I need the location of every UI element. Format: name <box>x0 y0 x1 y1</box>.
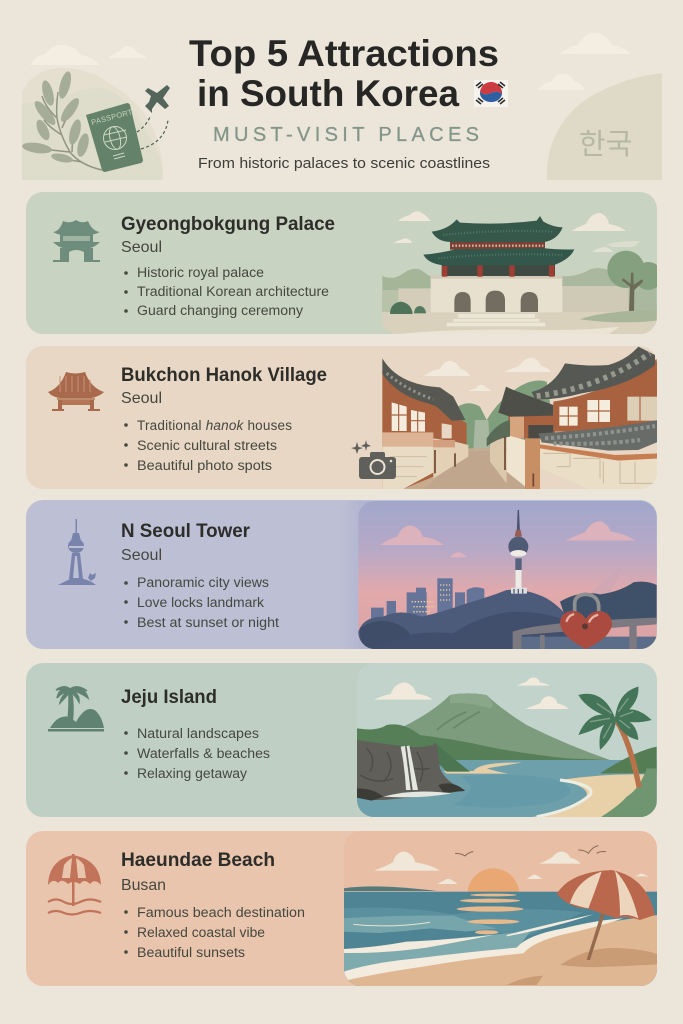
panel: Haeundae Beach <box>26 831 658 988</box>
text: Bukchon details: Seoul <box>121 390 162 407</box>
illustration: beach at sunset <box>343 831 658 988</box>
text: Haeundae details <box>121 850 305 960</box>
header decoration: right panel with Korean text: 한국 <box>579 129 632 161</box>
icon: South Korean flag <box>474 80 508 107</box>
text: palace details: Gyeongbokgung Palace <box>121 214 335 235</box>
text: palace details: Historic royal palace <box>137 265 264 280</box>
panel: Gyeongbokgung Palace <box>26 192 662 335</box>
header decoration: right panel with Korean text <box>547 73 662 180</box>
icon: plane with dashed route <box>137 85 170 149</box>
panel: Bukchon Hanok Village <box>26 346 660 489</box>
text: Bukchon details: Beautiful photo spots <box>137 458 272 473</box>
illustration: N Seoul Tower at sunset <box>358 501 657 649</box>
text: Haeundae details: Relaxed coastal vibe <box>137 925 265 940</box>
illustration: Gyeongbokgung gate <box>382 211 662 335</box>
text: Jeju details: Jeju Island <box>121 687 217 708</box>
icon: passport <box>86 103 143 172</box>
text: tower details: Panoramic city views <box>137 575 269 590</box>
text: Haeundae details: Beautiful sunsets <box>137 945 245 960</box>
text: Bukchon details: Traditional hanok houses <box>137 418 292 433</box>
text: Jeju details: Natural landscapes <box>137 726 259 741</box>
text: tower details: N Seoul Tower <box>121 521 251 542</box>
text: Bukchon details: Bukchon Hanok Village <box>121 365 327 386</box>
title: Top 5 Attractions <box>189 33 499 74</box>
text: Haeundae details: Haeundae Beach <box>121 850 275 871</box>
text: tower details: Seoul <box>121 547 162 564</box>
text: tower details <box>121 521 279 630</box>
panel: N Seoul Tower <box>26 500 657 649</box>
text: palace details: Seoul <box>121 239 162 256</box>
panel: Jeju Island <box>26 663 657 819</box>
text: tower details: Love locks landmark <box>137 595 264 610</box>
title <box>189 33 499 114</box>
decorative clouds in header <box>30 33 631 90</box>
text: Bukchon details: Scenic cultural streets <box>137 438 277 453</box>
icon: passport: PASSPORT <box>90 107 134 127</box>
title: in South Korea <box>197 73 459 114</box>
text: palace details: Traditional Korean architecture <box>137 284 329 299</box>
text: palace details: Guard changing ceremony <box>137 303 303 318</box>
icon: tower <box>58 519 96 585</box>
text: tower details: Best at sunset or night <box>137 615 279 630</box>
icon: camera with sparkles <box>351 440 396 479</box>
icon: beach umbrella <box>48 854 101 914</box>
tagline: From historic palaces to scenic coastlines <box>198 156 490 172</box>
text: Bukchon details <box>121 365 327 473</box>
text: Jeju details: Relaxing getaway <box>137 766 247 781</box>
text: Haeundae details: Famous beach destination <box>137 905 305 920</box>
illustration: hanok street <box>351 347 660 489</box>
text: palace details <box>121 214 335 318</box>
text: Jeju details: Waterfalls & beaches <box>137 746 270 761</box>
illustration: Jeju coast and volcano <box>357 663 657 819</box>
subtitle: must-visit places: MUST-VISIT PLACES <box>213 124 479 146</box>
text: Haeundae details: Busan <box>121 877 166 894</box>
icon: palace <box>53 220 100 262</box>
icon: olive branch <box>21 70 102 170</box>
text: Jeju details <box>121 687 270 781</box>
icon: hanok gate <box>48 372 104 411</box>
icon: palm island <box>48 687 104 732</box>
header decoration: botanical and passport <box>21 68 170 180</box>
